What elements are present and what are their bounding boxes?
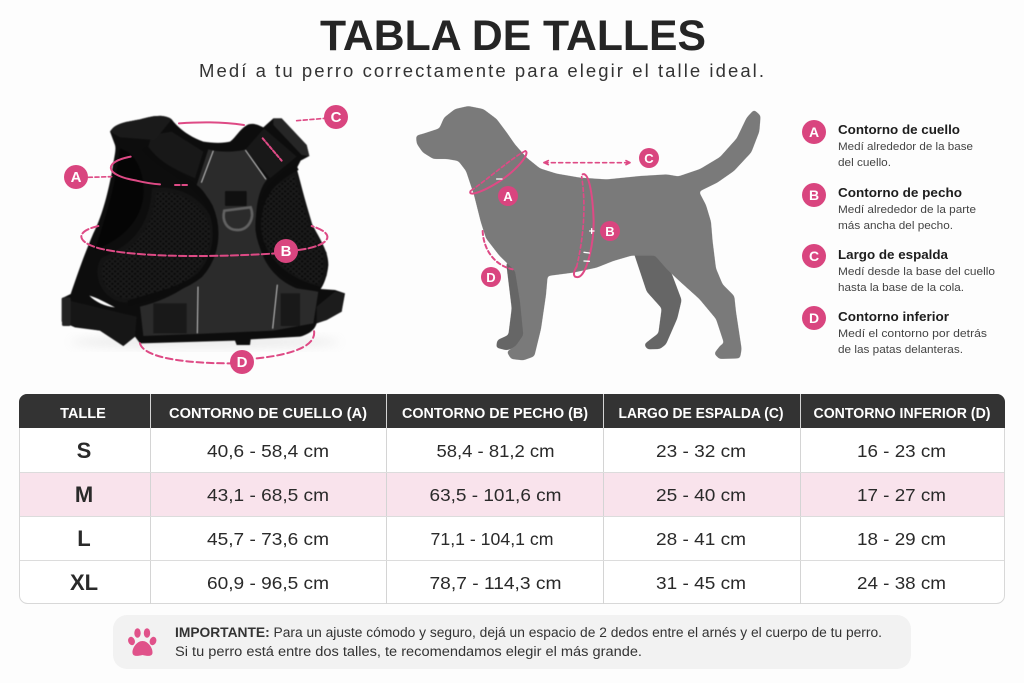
center panel bbox=[140, 149, 318, 336]
badge A dog bbox=[498, 186, 518, 206]
table header: CONTORNO DE CUELLO (A) bbox=[169, 406, 367, 422]
row L: 71,1 - 104,1 cm bbox=[430, 529, 554, 549]
table header: TALLE bbox=[60, 406, 106, 422]
badge C harness bbox=[324, 105, 348, 129]
legend item A: Contorno de cuello bbox=[838, 122, 960, 137]
legend item B: más ancha del pecho. bbox=[838, 220, 953, 232]
row L: L bbox=[77, 526, 91, 551]
table header: CONTORNO DE PECHO (B) bbox=[402, 406, 588, 422]
row L: 28 - 41 cm bbox=[656, 529, 746, 549]
legend item A bbox=[802, 120, 973, 169]
badge A harness: A bbox=[71, 169, 82, 186]
badge B harness bbox=[274, 239, 298, 263]
measure lines on harness bbox=[81, 118, 327, 363]
white gap bbox=[89, 296, 115, 307]
legend item A: del cuello. bbox=[838, 157, 891, 169]
size table bbox=[19, 394, 1005, 604]
legend bbox=[802, 120, 995, 356]
badge C dog: C bbox=[644, 151, 654, 166]
table header: LARGO DE ESPALDA (C) bbox=[618, 406, 784, 422]
badge D harness: D bbox=[237, 354, 248, 371]
row S: 23 - 32 cm bbox=[656, 441, 746, 461]
dog measure lines bbox=[470, 151, 630, 277]
legend item D: D bbox=[809, 310, 819, 326]
badge C dog bbox=[639, 148, 659, 168]
harness illustration bbox=[62, 105, 348, 374]
row M: 43,1 - 68,5 cm bbox=[207, 485, 329, 505]
legend item C: C bbox=[809, 248, 819, 264]
row S bbox=[77, 438, 946, 463]
legend item A: Medí alrededor de la base bbox=[838, 141, 973, 153]
row XL: XL bbox=[70, 570, 98, 595]
dog body bbox=[416, 106, 761, 360]
row XL: 24 - 38 cm bbox=[857, 573, 946, 593]
row M: 63,5 - 101,6 cm bbox=[430, 485, 562, 505]
row S: 58,4 - 81,2 cm bbox=[436, 441, 554, 461]
row XL: 31 - 45 cm bbox=[656, 573, 746, 593]
row M: M bbox=[75, 482, 93, 507]
icon: paw bbox=[127, 628, 158, 656]
strap band outlines bbox=[128, 148, 216, 303]
legend item D: de las patas delanteras. bbox=[838, 344, 963, 356]
legend item D bbox=[802, 306, 987, 356]
right mesh panel bbox=[259, 173, 325, 287]
legend item C: Largo de espalda bbox=[838, 247, 949, 262]
row XL: 60,9 - 96,5 cm bbox=[207, 573, 329, 593]
D-ring bbox=[225, 191, 247, 206]
row L: 45,7 - 73,6 cm bbox=[207, 529, 329, 549]
legend item C bbox=[802, 244, 995, 294]
legend item C: hasta la base de la cola. bbox=[838, 282, 964, 294]
row L: 18 - 29 cm bbox=[857, 529, 946, 549]
row M: 17 - 27 cm bbox=[857, 485, 946, 505]
badge D dog bbox=[481, 267, 501, 287]
legend item B: Medí alrededor de la parte bbox=[838, 204, 976, 216]
row M highlight bbox=[20, 472, 1004, 516]
badge B harness: B bbox=[281, 243, 292, 260]
note text bbox=[175, 625, 882, 659]
legend item D: Medí el contorno por detrás bbox=[838, 328, 987, 340]
row L bbox=[77, 526, 946, 551]
badge A harness bbox=[64, 165, 88, 189]
row XL bbox=[70, 570, 946, 595]
legend item C: Medí desde la base del cuello bbox=[838, 266, 995, 278]
inner dark lining bbox=[95, 148, 144, 250]
left mesh panel bbox=[100, 190, 213, 301]
note text: IMPORTANTE: Para un ajuste cómodo y seguro, dejá un espacio de 2 dedos entre el arnés y el cuerpo de tu perro. bbox=[175, 625, 882, 640]
legend item D: Contorno inferior bbox=[838, 309, 949, 324]
badge D harness bbox=[230, 350, 254, 374]
legend item B: Contorno de pecho bbox=[838, 185, 962, 200]
buckles and straps bbox=[110, 116, 172, 140]
table header bbox=[19, 394, 1005, 428]
badge B dog: B bbox=[605, 224, 615, 239]
row S: 16 - 23 cm bbox=[857, 441, 946, 461]
dog illustration bbox=[416, 106, 761, 360]
far legs bbox=[496, 252, 682, 350]
badge C harness: C bbox=[331, 109, 342, 126]
row M bbox=[75, 482, 946, 507]
subtitle: Medí a tu perro correctamente para elegir el talle ideal. bbox=[199, 60, 764, 81]
legend item B bbox=[802, 183, 976, 232]
badge A dog: A bbox=[503, 189, 513, 204]
table header: CONTORNO INFERIOR (D) bbox=[814, 406, 991, 422]
row S: 40,6 - 58,4 cm bbox=[207, 441, 329, 461]
row XL: 78,7 - 114,3 cm bbox=[430, 573, 562, 593]
legend item A: A bbox=[809, 124, 819, 140]
badge B dog bbox=[600, 221, 620, 241]
important note bbox=[113, 615, 911, 669]
badge D dog: D bbox=[486, 270, 496, 285]
row S: S bbox=[77, 438, 91, 463]
harness body bbox=[62, 116, 345, 346]
row M: 25 - 40 cm bbox=[656, 485, 746, 505]
reflective strips bbox=[197, 150, 277, 333]
note text: Si tu perro está entre dos talles, te recomendamos elegir el más grande. bbox=[175, 644, 642, 659]
title: TABLA DE TALLES bbox=[320, 12, 706, 60]
legend item B: B bbox=[809, 187, 819, 203]
